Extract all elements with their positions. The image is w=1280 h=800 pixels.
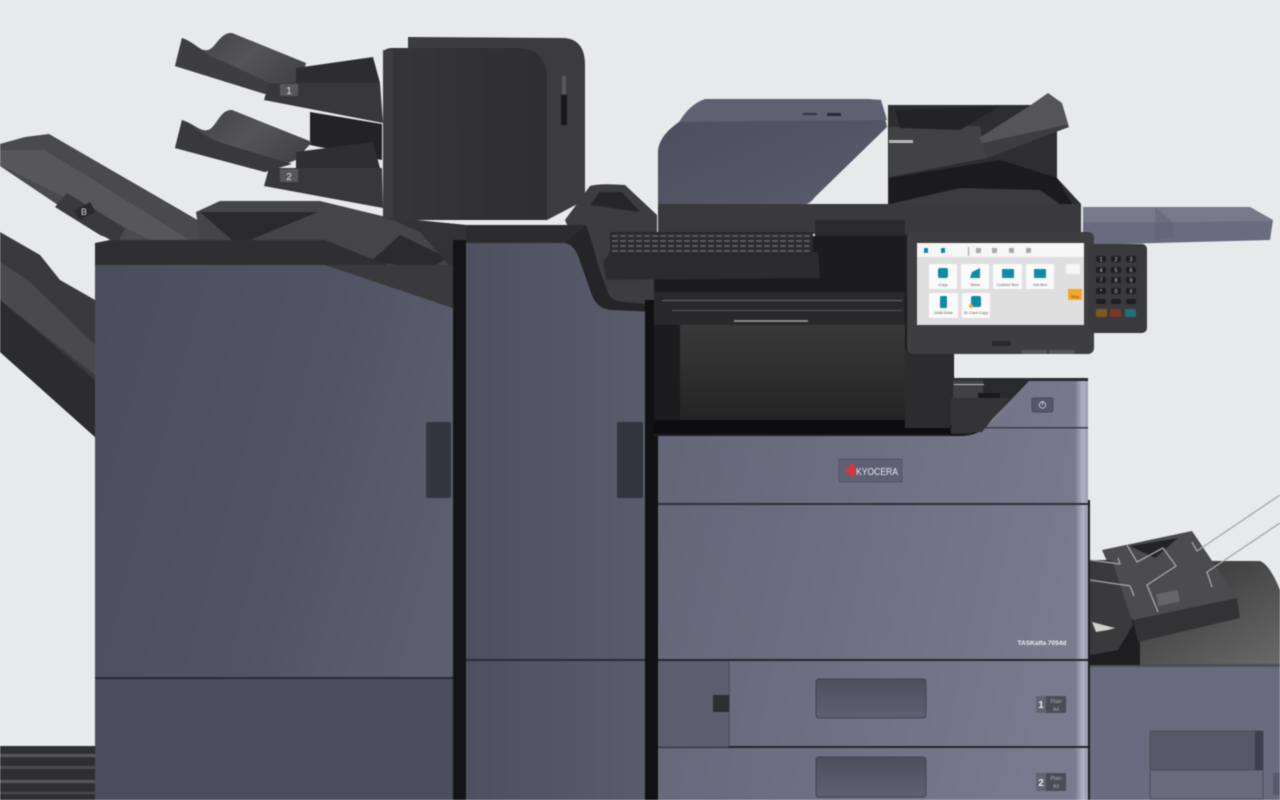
finisher upper trays xyxy=(175,33,383,208)
drawer handle 2 xyxy=(816,757,926,797)
numeric keypad: 5 xyxy=(1115,268,1118,274)
finisher tray B xyxy=(0,134,232,242)
drawer label 2: Plain xyxy=(1050,776,1062,782)
left door handle xyxy=(426,422,451,498)
drawer label 2: 2 xyxy=(1038,778,1044,789)
middle door handle xyxy=(617,422,643,498)
tray 1: 1 xyxy=(286,86,292,97)
numeric keypad: 0 xyxy=(1115,289,1118,295)
orange stop button xyxy=(1068,289,1082,300)
main unit body xyxy=(658,380,1088,800)
toner access slot xyxy=(951,378,1088,434)
touch screen xyxy=(917,243,1084,325)
numeric keypad: 4 xyxy=(1100,268,1103,274)
right edge shadow of main unit over finishing area xyxy=(1088,500,1090,800)
orange stop button: Stop xyxy=(1071,294,1080,299)
tray label B xyxy=(74,202,96,220)
KYOCERA logo plate: KYOCERA xyxy=(856,466,898,478)
tile Job Box: Job Box xyxy=(1033,282,1047,287)
numeric keypad: 2 xyxy=(1115,257,1118,263)
right document finishing unit xyxy=(1090,561,1280,800)
drawer label 2 xyxy=(1036,773,1066,791)
document feeder cover xyxy=(658,99,887,204)
power button xyxy=(1032,398,1053,412)
tile USB Drive: USB Drive xyxy=(934,310,954,315)
document feeder tray xyxy=(889,93,1069,177)
drawer label 2: A3 xyxy=(1053,784,1059,790)
tray 2: 2 xyxy=(286,172,292,183)
numeric keypad: 8 xyxy=(1115,278,1118,284)
drawer label 1: Plain xyxy=(1050,699,1062,705)
numeric keypad: 1 xyxy=(1100,257,1103,263)
tray label B: B xyxy=(81,207,87,217)
tile Custom Box: Custom Box xyxy=(997,282,1018,287)
drawer label 1 xyxy=(1036,696,1066,713)
lower left finisher tray xyxy=(0,232,95,437)
tray 1 xyxy=(175,33,383,123)
tile Send xyxy=(961,264,989,289)
main unit dark upper section xyxy=(658,105,1081,250)
gap between units xyxy=(453,240,466,800)
tile Send: Send xyxy=(970,282,980,287)
finisher cube xyxy=(383,37,585,220)
output opening xyxy=(654,236,954,436)
drawer label 1: A4 xyxy=(1053,707,1059,713)
tile USB Drive xyxy=(929,293,958,318)
middle unit xyxy=(466,184,657,800)
numeric keypad: # xyxy=(1130,289,1133,295)
tile Copy xyxy=(929,264,957,289)
control panel xyxy=(907,232,1094,354)
gap between middle and main xyxy=(645,300,658,800)
document feeder attachment xyxy=(1090,495,1280,655)
bottom left base stack xyxy=(0,746,95,800)
tray 2 xyxy=(175,110,383,208)
numeric keypad: 6 xyxy=(1130,268,1133,274)
tile Copy: Copy xyxy=(938,282,948,287)
tile Job Box xyxy=(1026,264,1054,289)
KYOCERA logo plate xyxy=(839,459,902,482)
phone shortcut xyxy=(1066,264,1080,274)
drawer label 1: 1 xyxy=(1038,700,1044,711)
numeric keypad xyxy=(1088,244,1147,333)
left finisher body xyxy=(95,240,463,800)
numeric keypad: 3 xyxy=(1130,257,1133,263)
tile Custom Box xyxy=(993,264,1022,289)
numeric keypad: 7 xyxy=(1100,278,1103,284)
numeric keypad: * xyxy=(1100,289,1102,295)
right side paper extension tray xyxy=(1083,207,1273,245)
tile ID Card Copy xyxy=(962,293,990,318)
keyboard xyxy=(603,232,820,280)
model name: TASKalfa 7054d xyxy=(1018,640,1066,647)
drawer handle 1 xyxy=(816,679,926,718)
finisher top surface xyxy=(95,201,466,308)
dark block between trays xyxy=(310,112,382,160)
numeric keypad: 9 xyxy=(1130,278,1133,284)
tile ID Card Copy: ID Card Copy xyxy=(964,310,988,315)
